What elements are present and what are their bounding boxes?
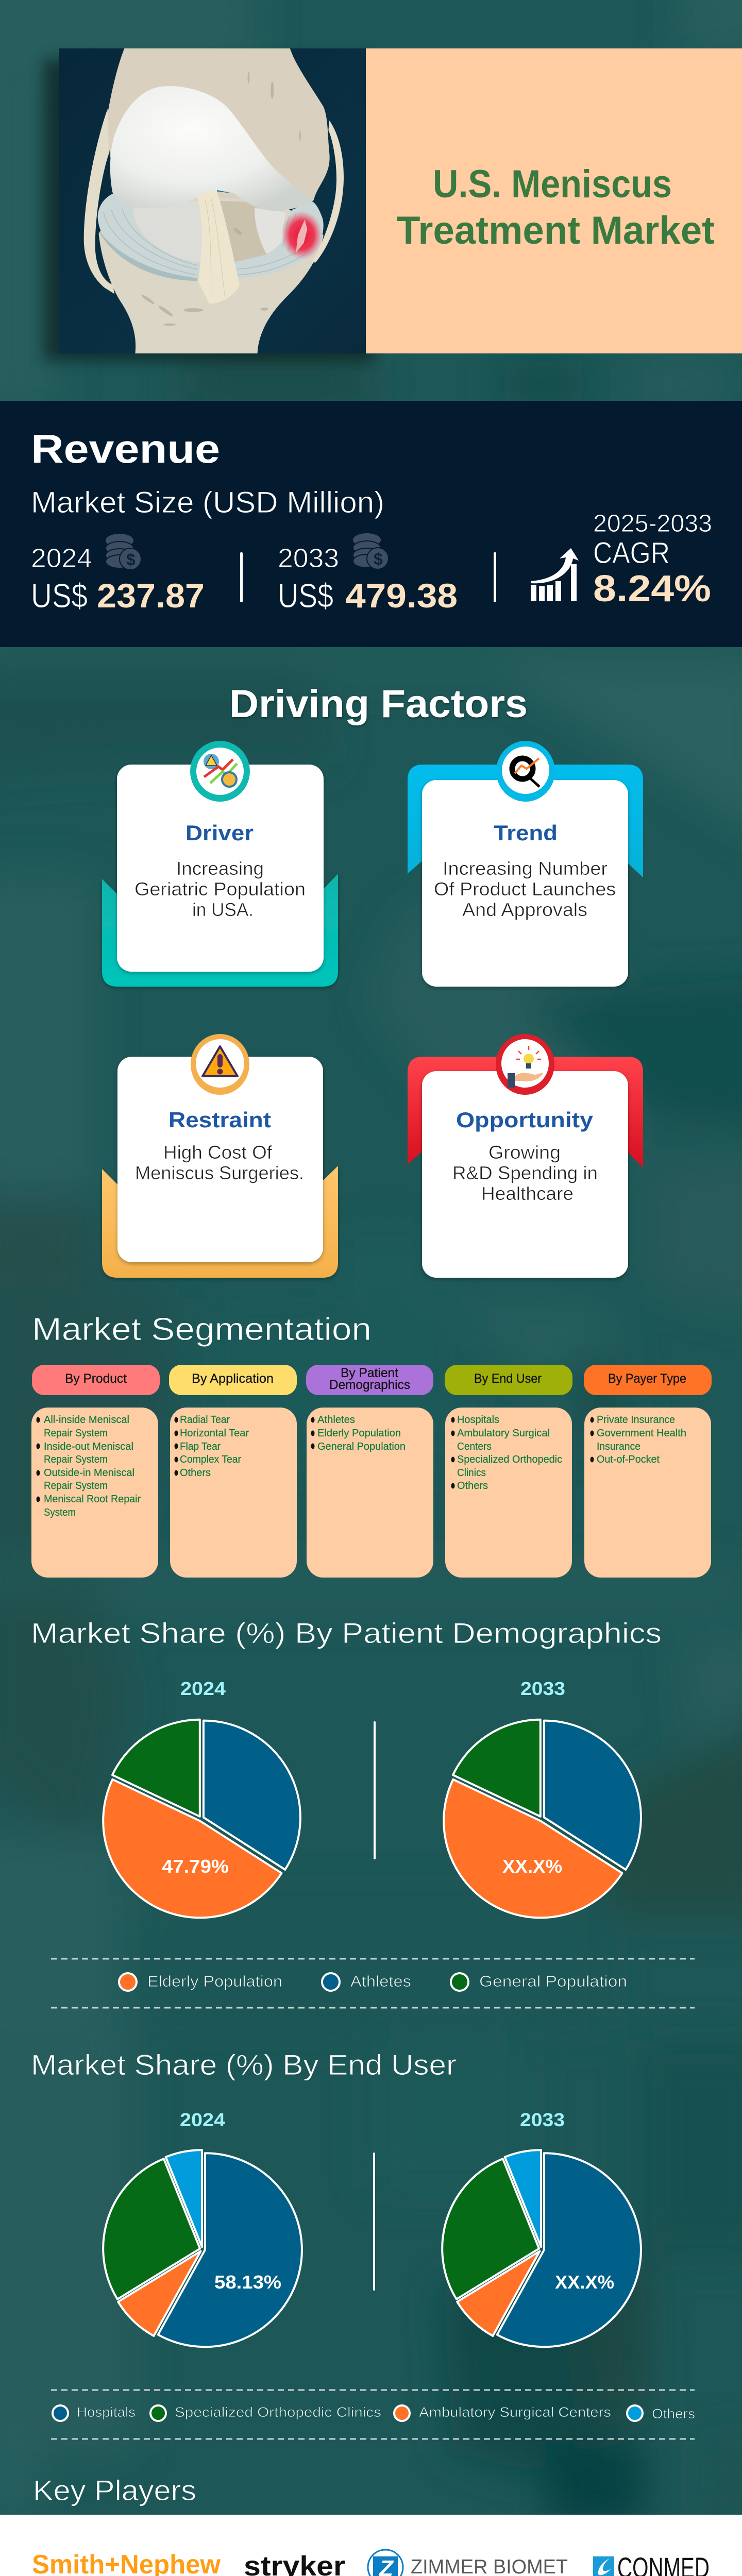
panel: restraint card (102, 1034, 338, 1278)
pie chart: end user 2033 (442, 2150, 641, 2347)
panel: segment by product: Outside-in Meniscal (44, 1467, 134, 1479)
chart label: 2033: 2033 (520, 2109, 565, 2130)
panel: opportunity card (408, 1034, 643, 1278)
panel: segment by end user: Hospitals (457, 1414, 499, 1426)
panel: segment by payer type: Government Health (597, 1428, 686, 1439)
icon: coins 2024: $ (126, 550, 136, 569)
panel: segment by payer type (584, 1365, 712, 1578)
card text: And Approvals (462, 899, 587, 920)
panel: segment by end user: Specialized Orthopedic (457, 1454, 562, 1465)
card text: Increasing (176, 858, 264, 879)
stat: 2033 revenue: 479.38 (345, 577, 458, 615)
card text (434, 858, 616, 920)
pie chart: patient demographics 2024 (103, 1720, 300, 1918)
title background (366, 48, 742, 353)
panel: segment by payer type: Private Insurance (597, 1414, 675, 1426)
panel: segment by payer type: By Payer Type (608, 1371, 686, 1386)
stat: CAGR: CAGR (593, 536, 670, 570)
stat: CAGR: 2025-2033 (593, 510, 712, 537)
panel: segment by end user: Clinics (457, 1467, 486, 1479)
card text: Geriatric Population (134, 878, 306, 900)
subheading: market size: Market Size (USD Million) (31, 486, 384, 519)
value label: XX.X%: XX.X% (555, 2272, 614, 2293)
divider (373, 2153, 375, 2291)
legend: patient demographics: Elderly Population (147, 1972, 282, 1990)
panel: segment by product: System (44, 1507, 76, 1518)
heading: revenue: Revenue (31, 426, 220, 471)
divider (494, 552, 496, 602)
heading: market share by patient demographics: Market Share (%) By Patient Demographics (31, 1617, 662, 1649)
panel: segment by patient demographics: Demographics (329, 1378, 410, 1392)
panel: segment by application (169, 1365, 297, 1578)
heading: key players: Key Players (33, 2474, 196, 2506)
panel: segment by product: Meniscal Root Repair (44, 1494, 141, 1505)
icon: coins 2033: $ (374, 550, 383, 568)
stat: 2033 revenue (278, 544, 458, 615)
pie chart: patient demographics 2033 (444, 1720, 641, 1918)
card text (135, 1142, 304, 1183)
panel: segment by end user: Ambulatory Surgical (457, 1428, 550, 1439)
heading: market share by end user: Market Share (%) By End User (31, 2048, 457, 2081)
title: Treatment Market (397, 209, 715, 252)
heading: driving factors: Driving Factors (229, 682, 528, 726)
value label: 58.13%: 58.13% (214, 2272, 281, 2293)
stat: 2024 revenue (31, 544, 205, 615)
legend: end user: Specialized Orthopedic Clinics (175, 2404, 381, 2420)
icon: warning triangle (191, 1034, 249, 1095)
divider (240, 552, 243, 602)
title (397, 162, 715, 252)
panel: segment by product: Repair System (44, 1428, 108, 1439)
icon: trend magnifier (496, 741, 555, 802)
card text: Growing (488, 1142, 561, 1163)
legend: end user: Ambulatory Surgical Centers (419, 2404, 611, 2420)
title: U.S. Meniscus (433, 162, 672, 206)
panel: segment by patient demographics (306, 1365, 433, 1578)
header panel (44, 48, 742, 361)
panel: segment by product (31, 1365, 160, 1578)
stat: 2024 revenue: 2024 (31, 544, 92, 573)
card text: in USA. (192, 899, 254, 920)
panel: segment by patient demographics: General Population (317, 1441, 406, 1452)
card text: Of Product Launches (434, 878, 616, 900)
icon: hand with light bulb (496, 1034, 554, 1095)
stat: CAGR: 8.24% (593, 568, 711, 609)
panel: segment by application: Horizontal Tear (180, 1428, 249, 1439)
divider (374, 1721, 376, 1859)
card text (452, 1142, 598, 1204)
panel: segment by product: All-inside Meniscal (44, 1414, 129, 1426)
panel: segment by payer type: Insurance (597, 1441, 640, 1452)
panel: segment by product: Repair System (44, 1454, 108, 1465)
chart label: 2024: 2024 (180, 2109, 225, 2130)
pie chart: end user 2024 (103, 2150, 302, 2347)
legend: end user: Others (652, 2406, 695, 2421)
legend: patient demographics (51, 1959, 695, 2008)
stat: 2033 revenue: 2033 (278, 544, 339, 573)
panel: segment by end user: Centers (457, 1441, 492, 1452)
icon: coins 2033 (353, 533, 389, 569)
panel: segment by application: Radial Tear (180, 1414, 230, 1426)
stat: 2024 revenue: 237.87 (97, 577, 205, 615)
panel: key players logos (0, 2515, 742, 2576)
logo: Zimmer Biomet (368, 2550, 568, 2576)
chart label: 2024: 2024 (180, 1678, 226, 1699)
panel: segment by patient demographics: By Patient (341, 1366, 398, 1380)
panel: segment by end user: Others (457, 1480, 488, 1492)
stat: CAGR (593, 510, 712, 609)
value label: 47.79%: 47.79% (162, 1856, 229, 1877)
legend: patient demographics: General Population (479, 1972, 627, 1990)
heading: market segmentation: Market Segmentation (32, 1312, 372, 1347)
card heading: Trend (494, 821, 558, 845)
panel: segment by patient demographics: Elderly Population (317, 1428, 401, 1439)
stat: 2033 revenue: US$ (278, 577, 333, 615)
card text: R&D Spending in (452, 1162, 598, 1183)
panel: segment by application: Flap Tear (180, 1441, 221, 1452)
panel: segment by end user (445, 1365, 572, 1578)
panel: driver card (102, 741, 338, 987)
illustration: knee joint with torn meniscus (59, 48, 368, 353)
panel: segment by application: Complex Tear (180, 1454, 241, 1465)
panel: segment by application: Others (180, 1467, 211, 1479)
panel: segment by product: By Product (65, 1371, 127, 1386)
card heading: Restraint (168, 1108, 271, 1132)
card text: High Cost Of (163, 1142, 273, 1163)
card text: Increasing Number (443, 858, 608, 879)
legend: end user: Hospitals (77, 2404, 136, 2420)
legend: patient demographics: Athletes (350, 1972, 411, 1990)
card heading: Driver (185, 821, 254, 845)
stat: 2024 revenue: US$ (31, 577, 88, 615)
panel: segment by product: Inside-out Meniscal (44, 1441, 133, 1452)
panel: revenue (0, 401, 742, 647)
panel: trend card (408, 741, 643, 987)
panel: segment by payer type: Out-of-Pocket (597, 1454, 660, 1465)
card text (134, 858, 306, 920)
icon: coins 2024 (106, 534, 141, 570)
legend: end user (51, 2390, 695, 2439)
panel: segment by product: Repair System (44, 1480, 108, 1492)
panel: segment by application: By Application (192, 1371, 274, 1386)
card heading: Opportunity (456, 1108, 594, 1132)
panel: segment by patient demographics: Athletes (317, 1414, 355, 1426)
chart label: 2033: 2033 (520, 1678, 565, 1699)
card text: Meniscus Surgeries. (135, 1162, 304, 1183)
value label: XX.X%: XX.X% (502, 1856, 562, 1877)
icon: growth chart arrow (531, 548, 579, 601)
logo: ConMed (593, 2551, 710, 2576)
icon: driver gears and arrows (190, 741, 250, 802)
panel: segment by end user: By End User (474, 1371, 542, 1386)
card text: Healthcare (481, 1183, 574, 1204)
